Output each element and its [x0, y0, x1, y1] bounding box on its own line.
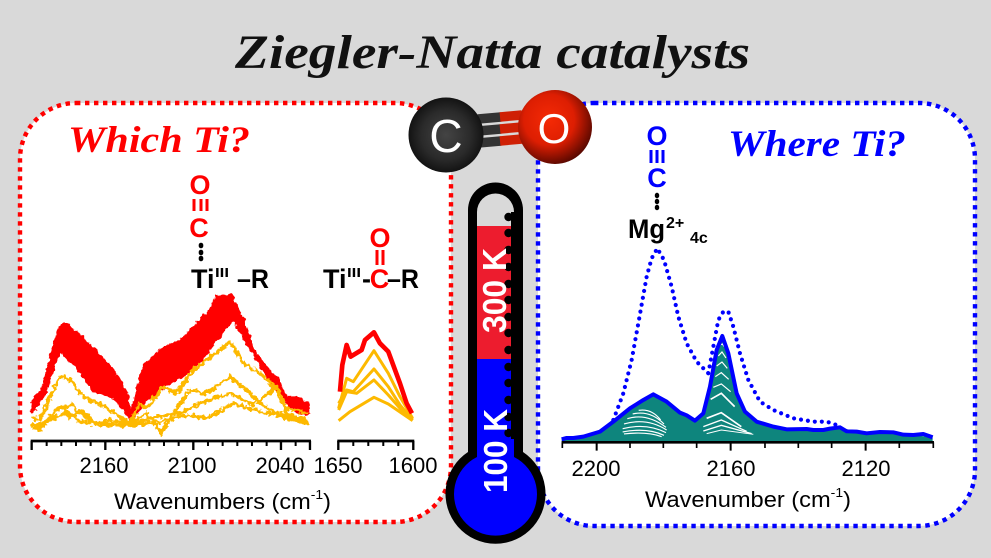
structure: Ti-CO adduct: C — [189, 213, 209, 243]
axis with ticks — [562, 442, 934, 451]
panel: which Ti — [20, 103, 451, 522]
chart: temperature series spectra — [562, 248, 934, 451]
structure: Mg-CO adduct — [628, 121, 708, 247]
axis title right: Wavenumber (cm — [645, 487, 818, 512]
axis title left: Wavenumbers (cm — [114, 489, 298, 514]
label: 300 K: 300 K — [476, 248, 513, 333]
dotted blue spectrum — [613, 248, 842, 427]
axis numbers right: 2200 — [572, 456, 620, 481]
triple bond — [478, 115, 522, 143]
carbon atom — [408, 98, 484, 172]
structure: Ti-CO adduct: O — [189, 170, 211, 200]
structure: Mg-CO adduct: 4c — [690, 230, 708, 247]
panel: where Ti — [538, 103, 975, 526]
structure: Ti-CO adduct — [189, 170, 269, 294]
structure: acyl species: - — [362, 264, 371, 294]
chart: CO stretching spectra — [31, 296, 414, 450]
axis numbers right: 2160 — [707, 456, 755, 481]
structure: acyl species: O — [369, 223, 391, 253]
thermometer tick marks — [504, 212, 515, 439]
axis with ticks — [31, 441, 414, 450]
structure: acyl species — [323, 223, 419, 294]
axis numbers right — [572, 456, 890, 481]
heading: where Ti: Where Ti? — [728, 124, 906, 165]
white gaps in series — [623, 344, 753, 437]
axis numbers left: 2100 — [168, 453, 216, 478]
structure: Mg-CO adduct: O — [646, 121, 668, 151]
axis numbers left: 1600 — [389, 453, 437, 478]
title: Ziegler-Natta catalysts — [234, 26, 750, 79]
axis title left: ) — [323, 489, 331, 514]
carbon atom: C — [429, 110, 463, 162]
structure: Ti-CO adduct: –R — [237, 264, 269, 294]
axis numbers left — [80, 453, 437, 478]
structure: Mg-CO adduct: Mg — [628, 214, 665, 244]
oxygen atom: O — [538, 105, 570, 152]
axis title right: ) — [843, 487, 851, 512]
axis title left: -1 — [311, 487, 323, 502]
structure: Ti-CO adduct: Ti — [191, 264, 215, 294]
axis numbers right: 2120 — [842, 456, 890, 481]
structure: Mg-CO adduct: C — [647, 163, 667, 193]
red band 2200-2020 — [32, 296, 308, 418]
axis numbers left: 2160 — [80, 453, 128, 478]
axis numbers left: 2040 — [256, 453, 304, 478]
axis title right: -1 — [831, 485, 843, 500]
structure: Mg-CO adduct: 2+ — [666, 215, 684, 232]
structure: Ti-CO adduct: III — [215, 265, 229, 280]
label: 100 K: 100 K — [477, 409, 514, 493]
structure: acyl species: –R — [387, 264, 419, 294]
teal filled spectra — [562, 336, 933, 442]
structure: acyl species: Ti — [323, 264, 347, 294]
orange spectra 2200-2020 — [32, 342, 308, 433]
red and orange spectra 1650-1600 — [339, 332, 413, 421]
solid blue spectrum — [562, 336, 933, 439]
heading: which Ti: Which Ti? — [68, 120, 250, 161]
icon: CO molecule — [408, 90, 592, 172]
structure: acyl species: C — [370, 264, 389, 294]
structure: acyl species: III — [347, 265, 361, 280]
oxygen atom — [518, 90, 592, 164]
axis numbers left: 1650 — [314, 453, 362, 478]
icon: thermometer — [445, 182, 546, 544]
